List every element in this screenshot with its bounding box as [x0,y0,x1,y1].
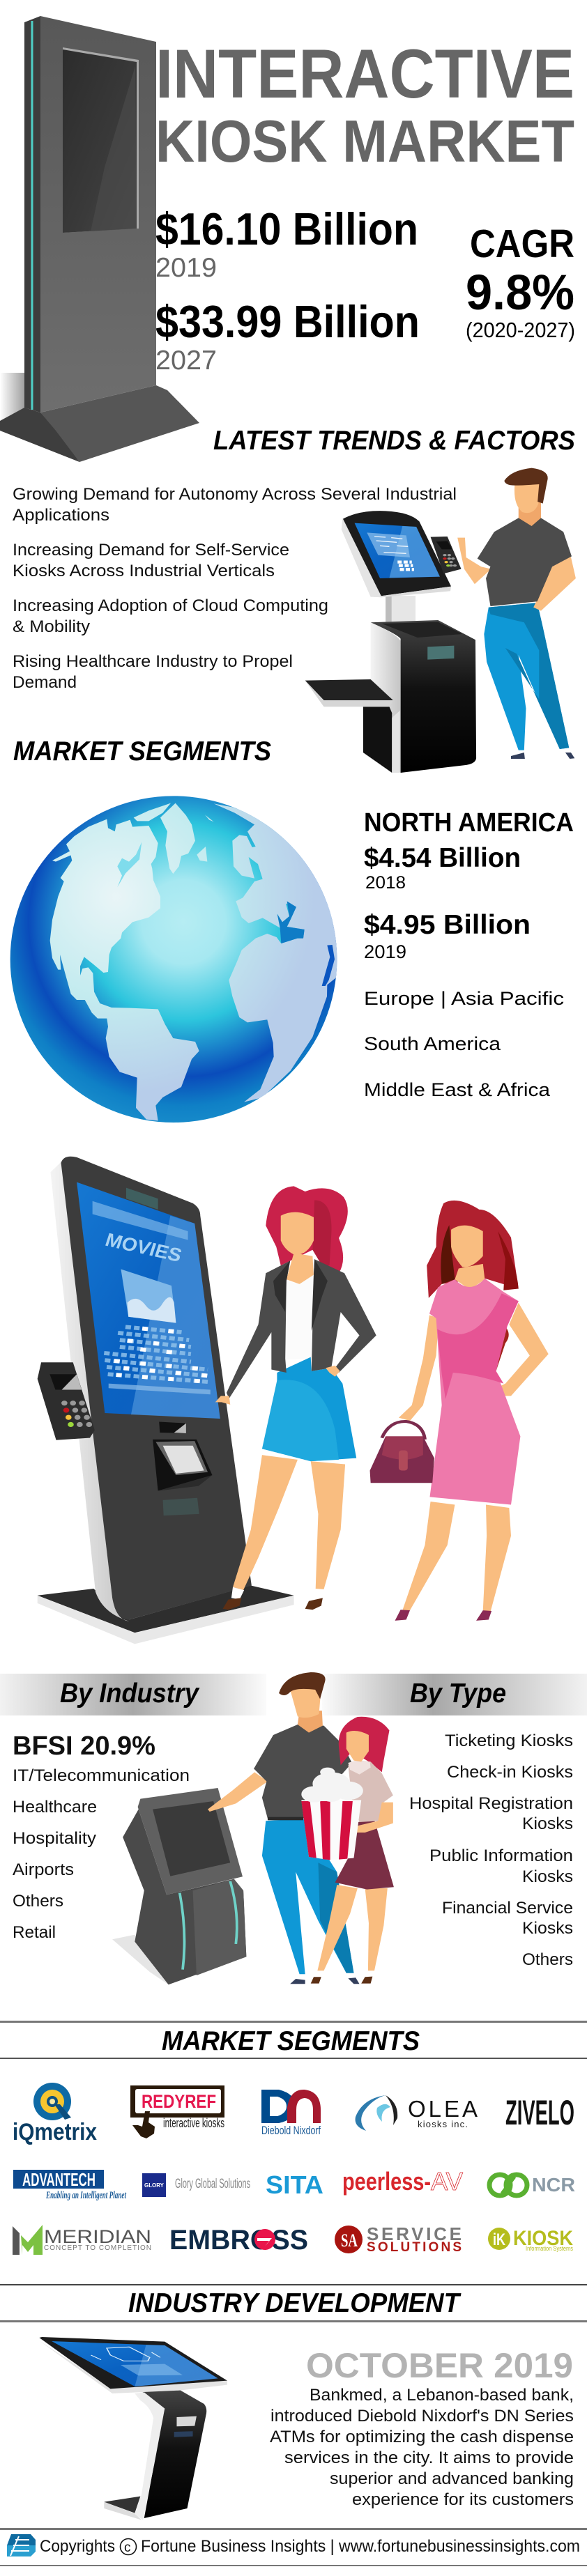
list: by industry: Hospitality [13,1829,96,1848]
CAGR callout: CAGR [470,222,574,266]
text block: regional figures: $4.54 Billion [364,843,521,873]
list: by industry: Others [13,1892,63,1911]
figure: man standing [457,468,576,759]
text block: regional figures: $4.95 Billion [364,910,531,940]
label: movies on screen: MOVIES [102,1229,184,1266]
text block: industry development: superior and advanced banking [330,2469,574,2488]
heading: date: OCTOBER 2019 [306,2346,573,2385]
text block: regional figures: Europe | Asia Pacific [364,988,564,1009]
logo: Peerless-AV: AV [431,2167,463,2196]
list: by industry: Healthcare [13,1798,97,1817]
logo: Service Solutions: SOLUTIONS [367,2240,462,2255]
illustration: two women at movie kiosk [38,1157,549,1644]
list: by industry: Retail [13,1923,56,1942]
logo: NCR: NCR [532,2174,575,2196]
list: by industry [13,1732,190,1942]
logo: Advantech: ADVANTECH [22,2169,96,2190]
text block: industry development: Bankmed, a Lebanon-based bank, [310,2386,574,2405]
footer: c [124,2540,131,2555]
logo: Olea Kiosks: kiosks inc. [418,2119,468,2129]
CAGR callout: 9.8% [466,265,574,321]
logo: Meridian: MERIDIAN [44,2226,151,2247]
text block: trends: Demand [13,673,77,692]
CAGR callout [466,222,575,342]
logo: Meridian: CONCEPT TO COMPLETION [44,2244,151,2252]
text block: regional figures [364,808,574,1100]
list: by type: Public Information [429,1846,573,1865]
text block: trends: Rising Healthcare Industry to Propel [13,652,293,671]
text block: industry development: ATMs for optimizing the cash dispense [270,2428,574,2446]
logo: Diebold Nixdorf: Diebold Nixdorf [261,2124,321,2137]
section rule pair and heading: industry development [0,2284,587,2322]
logo: Embross: EMBROSS [169,2225,308,2255]
text block: trends: Increasing Demand for Self-Service [13,541,289,560]
text block: industry development [270,2386,574,2509]
logo: iQmetrix [13,2083,97,2145]
text block: regional figures: 2019 [364,941,406,962]
icon: globe [10,796,342,1123]
logo: Advantech [13,2169,127,2201]
logo: iKiosk: KIOSK [513,2227,573,2250]
CAGR callout: (2020-2027) [466,318,575,342]
text block: industry development: introduced Diebold Nixdorf's DN Series [270,2407,574,2425]
logo: Glory Global Solutions: GLORY [144,2182,165,2189]
market size figures: $33.99 Billion [155,296,420,347]
title [155,35,574,175]
logo: Olea Kiosks: OLEA [408,2096,478,2122]
text block: trends: Kiosks Across Industrial Verticals [13,562,275,580]
list: by industry: BFSI 20.9% [13,1732,155,1761]
icon: dark curved kiosk [112,1788,246,1984]
logo: Diebold Nixdorf [261,2090,321,2137]
icon: self-service kiosk [305,511,476,773]
text block: regional figures: South America [364,1033,501,1054]
list: by type: Hospital Registration [409,1794,573,1813]
market size figures [155,203,420,376]
figure: woman with popcorn [301,1717,394,1984]
panel header: by type [322,1674,587,1715]
panel header: by industry: By Industry [60,1679,200,1709]
logo: SITA: SITA [266,2170,323,2199]
logo: Glory Global Solutions [142,2173,250,2197]
footer: Copyrights [40,2537,115,2556]
icon: tablet-style kiosk [39,2337,227,2520]
figure: man with blue trousers [208,1672,360,1984]
market size figures: $16.10 Billion [155,203,418,254]
logo: Fortune Business Insights [7,2534,36,2556]
logo: RedyRef: REDYREF [142,2091,216,2112]
icon: movie ticket kiosk [38,1157,294,1644]
figure: woman in blazer and blue skirt [215,1186,376,1610]
logo: RedyRef [130,2085,225,2138]
logo: Service Solutions: SERVICE [367,2223,462,2244]
illustration: man at self-service kiosk [305,468,576,773]
section rule pair and heading: market segments (companies) [0,2021,587,2059]
text block: industry development: experience for its customers [352,2490,574,2509]
icon: large grey kiosk totem [0,16,199,462]
panel header: by type: By Type [410,1679,506,1709]
section rule pair and heading: market segments (companies): MARKET SEGMENTS [162,2026,420,2056]
list: by industry: Airports [13,1860,74,1879]
footer [0,2528,587,2566]
market size figures: 2027 [155,346,217,376]
text block: trends [13,485,457,692]
panel header: by industry [0,1674,266,1715]
list: by type: Kiosks [522,1867,573,1886]
text block: regional figures: 2018 [365,873,406,893]
logo: Meridian [13,2225,151,2255]
market size figures: 2019 [155,253,217,283]
logo: NCR [489,2174,575,2196]
section rule pair and heading: industry development: INDUSTRY DEVELOPMENT [128,2288,462,2318]
footer: Fortune Business Insights | www.fortunebusinessinsights.com [141,2537,580,2556]
text block: regional figures: NORTH AMERICA [364,808,574,838]
text block: trends: Increasing Adoption of Cloud Computing [13,596,328,615]
logo: iKiosk: iK [493,2230,506,2249]
list: by type: Others [522,1950,573,1969]
text block: regional figures: Middle East & Africa [364,1079,551,1100]
illustration: couple with popcorn at kiosk [112,1672,394,1984]
logo: RedyRef: interactive kiosks [163,2116,224,2130]
logo: iQmetrix: iQmetrix [13,2119,97,2145]
list: by type: Ticketing Kiosks [445,1732,573,1750]
logo: Service Solutions [335,2223,462,2255]
logo: Service Solutions: SA [341,2230,358,2251]
logo: Olea Kiosks [356,2095,478,2131]
list: by type: Kiosks [522,1919,573,1938]
logo: Peerless-AV: peerless- [342,2167,431,2196]
list: by type: Check-in Kiosks [447,1763,573,1782]
figure: woman in pink dress with handbag [370,1201,549,1621]
heading: market segments: MARKET SEGMENTS [13,736,271,766]
text block: trends: Applications [13,506,109,525]
logo: iKiosk [488,2227,573,2252]
text block: trends: Growing Demand for Autonomy Across Several Industrial [13,485,457,504]
list: by type [409,1732,573,1969]
list: by type: Kiosks [522,1814,573,1833]
list: by industry: IT/Telecommunication [13,1766,190,1785]
logo: Advantech: Enabling an Intelligent Planet [45,2190,127,2201]
list: by type: Financial Service [442,1899,573,1918]
text block: industry development: services in the city. It aims to provide [284,2448,574,2467]
text block: trends: & Mobility [13,617,90,636]
logo: Glory Global Solutions: Glory Global Solutions [175,2177,250,2191]
logo: iKiosk: Information Systems [526,2245,573,2252]
